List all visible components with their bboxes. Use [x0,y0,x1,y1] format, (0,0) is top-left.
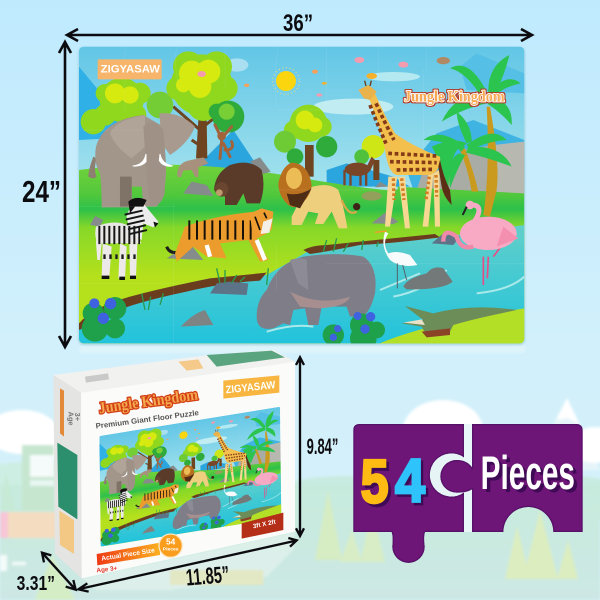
tiger [167,208,273,262]
label: 24 inches: 24” [22,174,61,209]
box size tag: 3ft X 2ft [252,518,277,530]
palms [483,107,497,217]
right puzzle piece [440,424,583,532]
left puzzle piece [353,424,464,563]
piece seams [79,47,524,343]
54 pieces puzzle badge [353,424,583,563]
arrow: width 36 inches [67,29,532,41]
birds [197,57,450,97]
box puzzle image [99,407,281,550]
arrow: box depth [42,553,76,590]
river [79,225,524,343]
box top [53,350,295,393]
puzzle logo: ZIGYASAW [101,64,161,76]
elephant [88,113,195,207]
box 54 pieces badge [159,534,182,557]
box size tag [242,513,283,539]
product box [17,350,338,595]
crocodile [402,306,517,337]
deer [343,157,375,186]
puzzle logo [98,59,162,79]
number 54: 5 [361,448,389,517]
trees [196,120,207,158]
box actual piece banner: Actual Piece Size [101,547,156,563]
flowers [82,297,385,352]
arrow: box height [296,357,304,536]
flamingo [443,201,518,285]
box subtitle: Premium Giant Floor Puzzle [95,408,199,431]
box front [81,362,295,578]
number 54: 4 [395,446,425,515]
label: 36 inches: 36” [283,10,313,37]
puzzle title: Jungle Kingdom [404,89,505,106]
box 54 pieces badge: 54 [166,536,176,546]
turtle [362,191,382,201]
arrow: height 24 inches [59,42,71,347]
box top details [85,351,285,383]
bear [214,163,263,205]
label: box depth: 3.31” [17,572,55,595]
label: box height: 9.84” [307,434,338,459]
sun [276,71,296,91]
monkey [215,125,232,158]
box side art: Age [66,412,75,426]
puzzle: jungle kingdom floor puzzle [78,47,525,352]
box left side [53,375,82,578]
box logo: ZIGYASAW [225,379,277,396]
box actual piece banner [97,543,160,565]
hippo [257,254,376,329]
box 54 pieces badge: Pieces [163,547,179,553]
rocks [90,157,460,327]
egret [375,231,417,288]
grass tufts [142,238,378,310]
box title: Jungle Kingdom [98,386,200,417]
number 54: 5 [363,450,391,519]
cliff [417,143,524,193]
lion [278,163,360,228]
number 54 [361,446,427,519]
arrow: box width [78,538,297,592]
zebra [95,198,158,278]
box side art: 3+ [73,413,82,421]
box side art [57,388,82,554]
hyena [177,157,208,177]
box age: Age 3+ [96,565,118,574]
giraffe [358,81,452,228]
label: box width: 11.85” [185,561,230,591]
number 54: 4 [397,449,427,518]
